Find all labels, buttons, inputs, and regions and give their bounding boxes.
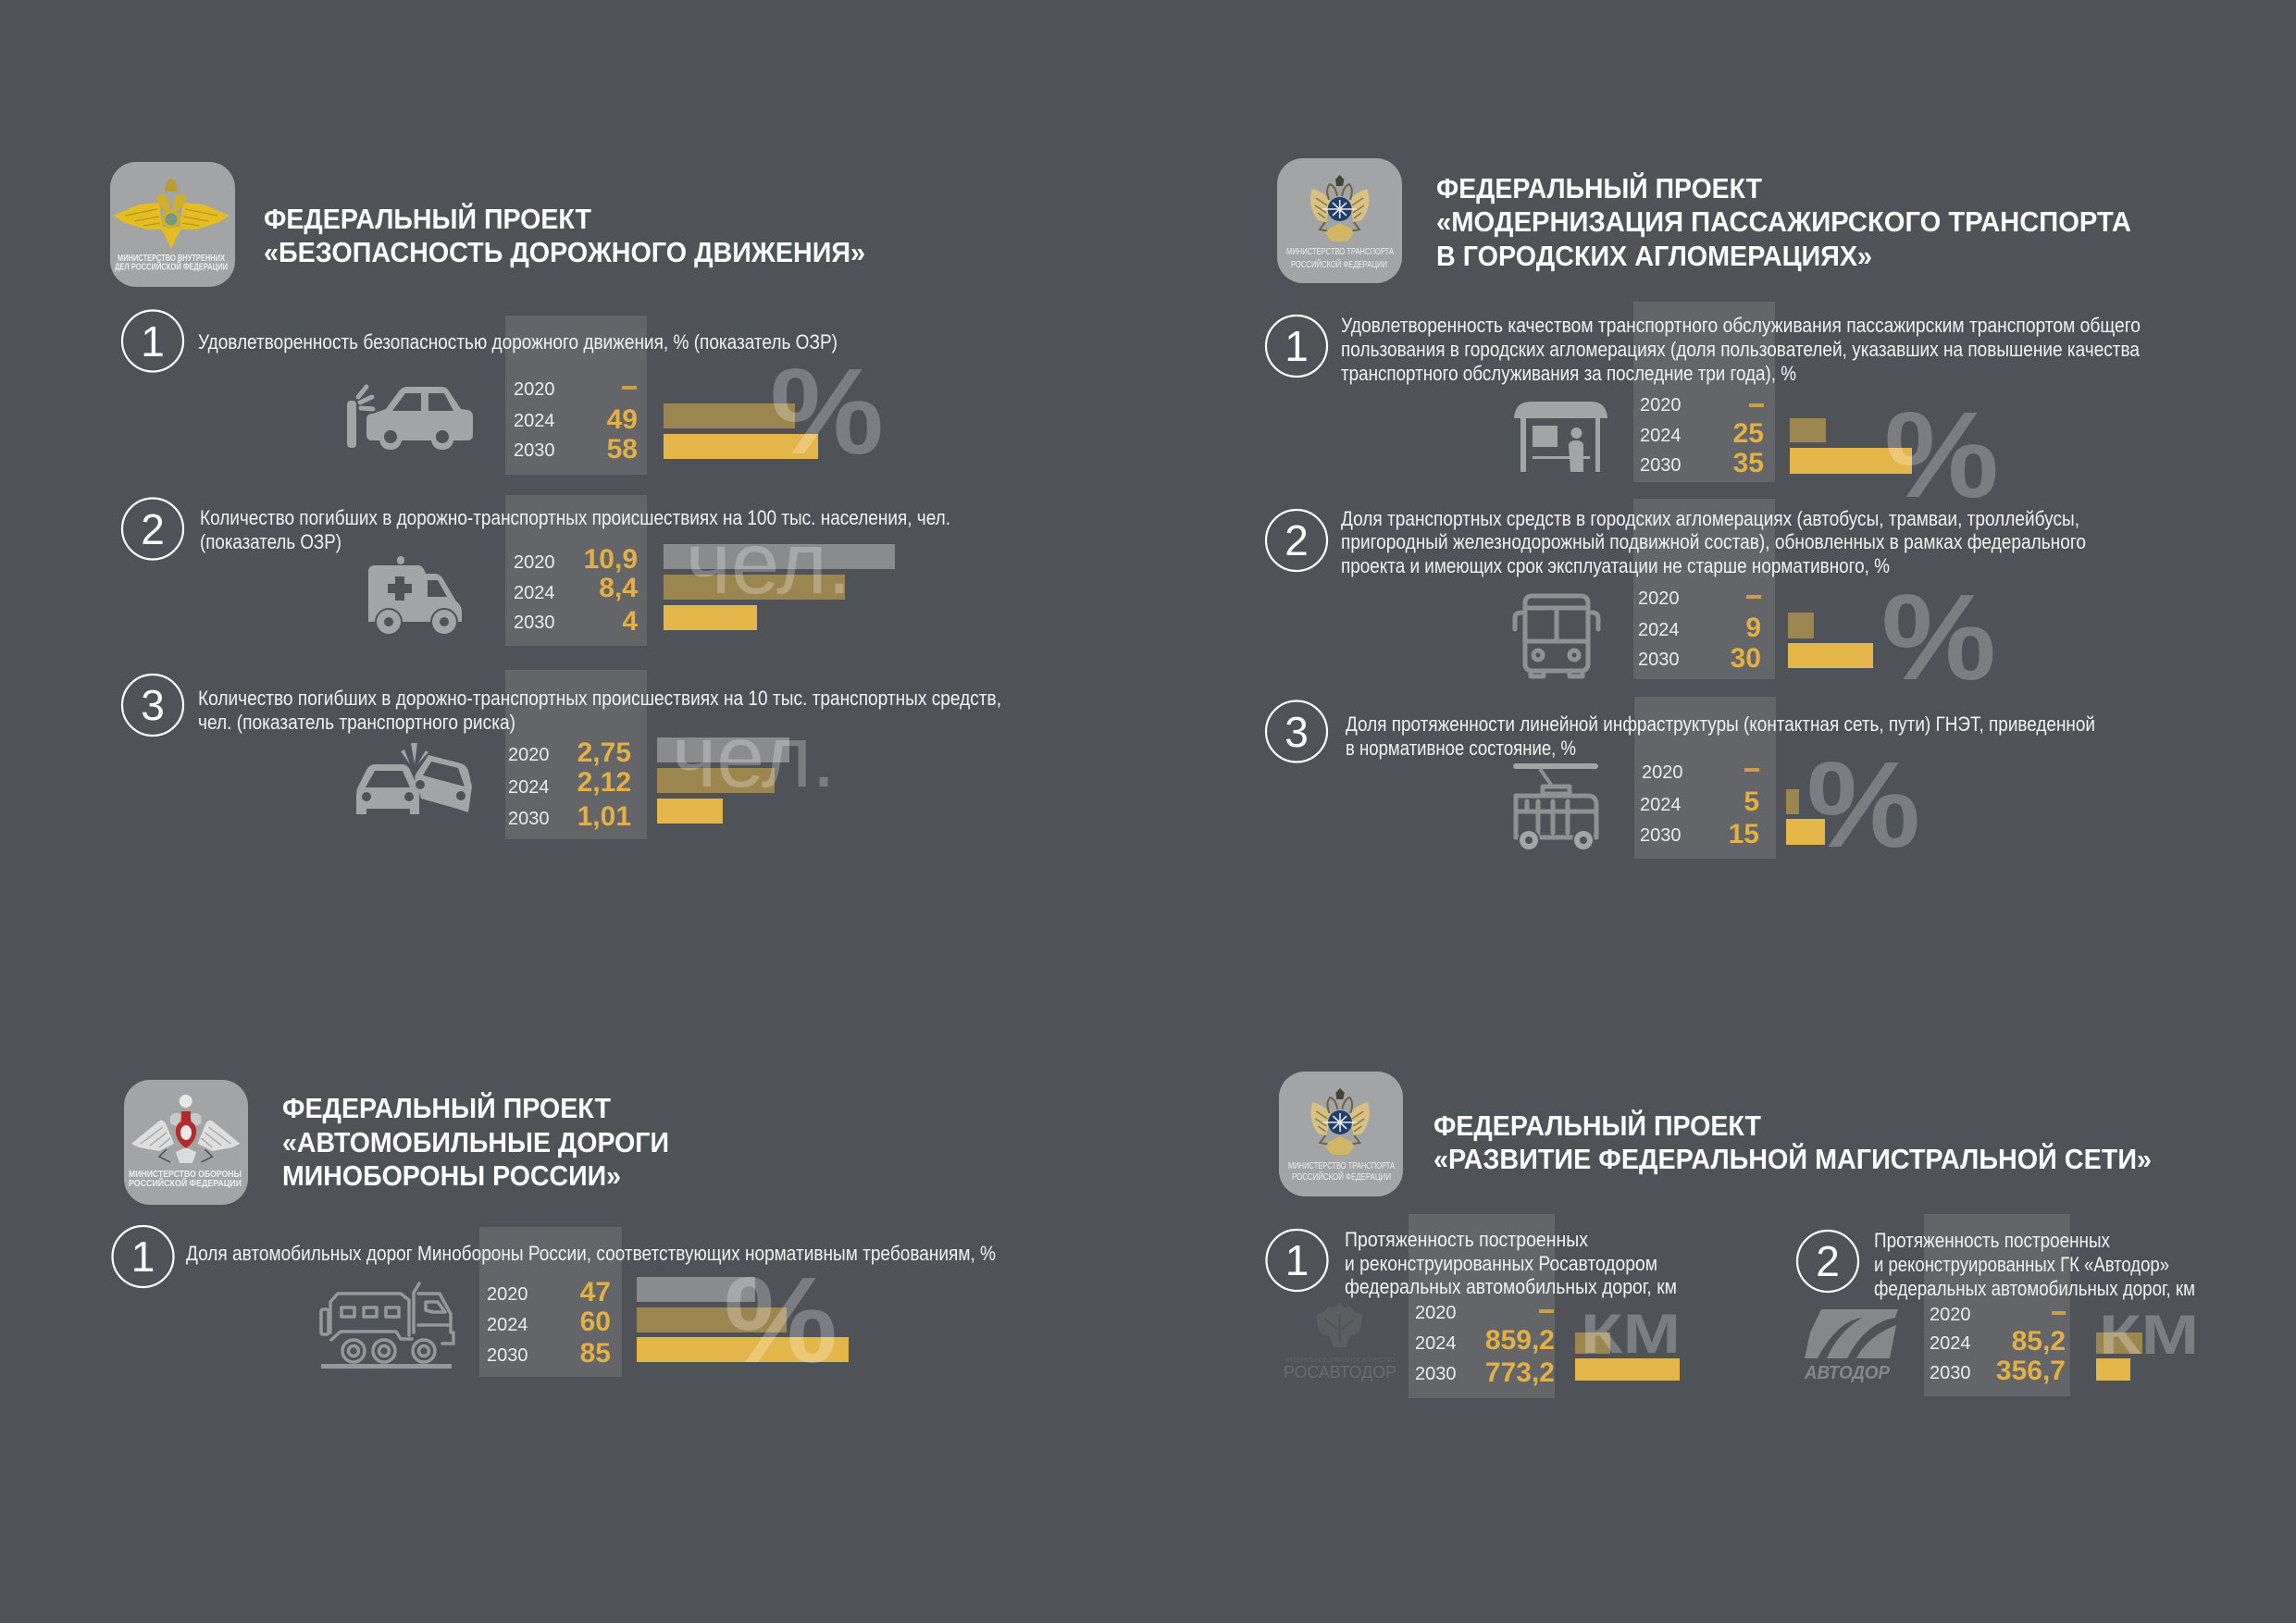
- indicator 2: 2: [1285, 516, 1309, 564]
- bar chart: [2096, 1304, 2199, 1381]
- icon: ambulance: [368, 556, 462, 636]
- panel: passenger transport: [1266, 158, 2141, 873]
- indicator 2: 2030: [1638, 650, 1679, 670]
- indicator 1: Удовлетворенность безопасностью дорожного движения, % (показатель ОЗР): [198, 330, 838, 353]
- indicator 2: [1797, 1214, 2199, 1396]
- bar chart: чел.: [686, 514, 851, 613]
- indicator 2: 2: [1816, 1237, 1840, 1285]
- heading: ФЕДЕРАЛЬНЫЙ ПРОЕКТ: [264, 202, 591, 235]
- bar chart: %: [770, 343, 884, 479]
- indicator 2: 2024: [1638, 620, 1679, 640]
- heading: [282, 1091, 669, 1192]
- logo: ministry of internal affairs: [110, 162, 235, 287]
- indicator 3: 5: [1744, 787, 1759, 817]
- logo: ministry of transport: РОССИЙСКОЙ ФЕДЕРАЦИИ: [1291, 258, 1387, 270]
- indicator 1: 2024: [514, 411, 555, 431]
- heading: [264, 202, 865, 268]
- bar chart: [664, 343, 884, 479]
- indicator 2: (показатель ОЗР): [200, 530, 341, 553]
- bar chart: КМ: [2099, 1304, 2199, 1366]
- indicator 2: Доля транспортных средств в городских агломерациях (автобусы, трамваи, троллейбусы,: [1341, 507, 2079, 530]
- indicator 3: Доля протяженности линейной инфраструктуры (контактная сеть, пути) ГНЭТ, приведенной: [1346, 712, 2095, 736]
- indicator 1: и реконструированных Росавтодором: [1345, 1252, 1657, 1275]
- indicator 1: [1266, 1214, 1681, 1398]
- indicator 1: 773,2: [1485, 1357, 1555, 1388]
- indicator 1: 2020: [1640, 395, 1681, 415]
- indicator 1: 2020: [487, 1284, 527, 1305]
- indicator 3: 2,12: [577, 767, 631, 798]
- logo: ministry of internal affairs: МИНИСТЕРСТВО ВНУТРЕННИХ: [118, 253, 225, 264]
- logo: ministry of transport: [1277, 158, 1402, 283]
- indicator 3: 2030: [508, 809, 550, 829]
- indicator 3: 3: [141, 681, 165, 729]
- logo: ministry of internal affairs: ДЕЛ РОССИЙСКОЙ ФЕДЕРАЦИИ: [115, 261, 228, 272]
- indicator 2: 2024: [1930, 1333, 1971, 1354]
- bar chart: %: [1806, 737, 1920, 873]
- indicator 1: 2030: [1640, 455, 1681, 476]
- logo: ministry of transport: МИНИСТЕРСТВО ТРАНСПОРТА: [1288, 1160, 1395, 1171]
- heading: ФЕДЕРАЛЬНЫЙ ПРОЕКТ: [1436, 171, 1762, 204]
- indicator 2: 2030: [514, 613, 555, 633]
- indicator 1: Доля автомобильных дорог Минобороны России, соответствующих нормативным требованиям, %: [186, 1242, 996, 1265]
- indicator 3: 3: [1285, 708, 1309, 756]
- indicator 2: 2024: [514, 583, 555, 603]
- bar chart: [1788, 569, 1996, 705]
- indicator 2: 85,2: [2012, 1326, 2066, 1357]
- indicator 1: 2020: [1415, 1303, 1457, 1323]
- indicator 3: 2024: [1640, 795, 1681, 815]
- indicator 2: 10,9: [584, 544, 638, 575]
- logo: ministry of defence: [124, 1080, 248, 1205]
- bar chart: КМ: [1581, 1303, 1681, 1365]
- indicator 2: Протяженность построенных: [1874, 1229, 2110, 1252]
- heading: «МОДЕРНИЗАЦИЯ ПАССАЖИРСКОГО ТРАНСПОРТА: [1436, 205, 2131, 238]
- heading: «АВТОМОБИЛЬНЫЕ ДОРОГИ: [282, 1126, 669, 1158]
- indicator 1: [113, 1226, 996, 1388]
- indicator 2: и реконструированных ГК «Автодор»: [1874, 1253, 2169, 1276]
- indicator 2: пригородный железнодорожный подвижной состав), обновленных в рамках федерального: [1341, 530, 2086, 553]
- logo: Avtodor: АВТОДОР: [1804, 1363, 1891, 1383]
- bar chart: [664, 514, 895, 630]
- indicator 3: 1,01: [577, 801, 631, 832]
- indicator 3: 2024: [508, 777, 550, 798]
- indicator 2: 9: [1745, 613, 1761, 643]
- indicator 2: 2020: [514, 552, 555, 573]
- indicator 2: [1266, 499, 2086, 705]
- bar chart: [1790, 387, 1999, 523]
- logo: Avtodor: [1804, 1309, 1898, 1383]
- indicator 1: 1: [1285, 1236, 1309, 1284]
- indicator 1: 1: [131, 1233, 155, 1281]
- indicator 1: 58: [607, 434, 638, 465]
- indicator 3: 2,75: [577, 737, 631, 768]
- indicator 2: 2020: [1930, 1305, 1971, 1325]
- bar chart: [637, 1252, 849, 1388]
- heading: В ГОРОДСКИХ АГЛОМЕРАЦИЯХ»: [1436, 240, 1872, 272]
- icon: bus: [1515, 596, 1598, 676]
- indicator 1: 2030: [514, 440, 555, 461]
- logo: Rosavtodor: РОСАВТОДОР: [1284, 1363, 1396, 1381]
- heading: [1433, 1109, 2152, 1175]
- indicator 1: 2024: [1415, 1333, 1457, 1354]
- indicator 2: 8,4: [599, 573, 638, 603]
- bar chart: [1575, 1303, 1681, 1381]
- heading: ФЕДЕРАЛЬНЫЙ ПРОЕКТ: [282, 1091, 611, 1124]
- indicator 1: федеральных автомобильных дорог, км: [1345, 1275, 1677, 1298]
- heading: «РАЗВИТИЕ ФЕДЕРАЛЬНОЙ МАГИСТРАЛЬНОЙ СЕТИ»: [1433, 1142, 2152, 1175]
- indicator 1: 35: [1733, 448, 1764, 478]
- icon: trolleybus: [1513, 763, 1598, 851]
- indicator 2: 2030: [1930, 1363, 1971, 1383]
- indicator 1: 1: [141, 317, 165, 365]
- indicator 3: 2020: [508, 745, 550, 765]
- logo: ministry of transport: [1279, 1072, 1403, 1196]
- indicator 2: 2020: [1638, 588, 1679, 609]
- indicator 1: 49: [607, 404, 638, 435]
- heading: «БЕЗОПАСНОСТЬ ДОРОЖНОГО ДВИЖЕНИЯ»: [264, 236, 865, 268]
- indicator 1: [122, 311, 884, 479]
- bar chart: чел.: [672, 708, 836, 806]
- indicator 3: [122, 670, 1001, 839]
- indicator 2: 356,7: [1996, 1356, 2066, 1386]
- indicator 3: [1266, 697, 2095, 873]
- icon: bus stop: [1514, 402, 1607, 472]
- indicator 2: 4: [622, 606, 638, 637]
- indicator 1: 47: [580, 1277, 611, 1307]
- heading: МИНОБОРОНЫ РОССИИ»: [282, 1159, 621, 1192]
- indicator 3: 2020: [1642, 762, 1682, 783]
- indicator 3: Количество погибших в дорожно-транспортных происшествиях на 10 тыс. транспортных средств,: [198, 687, 1001, 710]
- indicator 2: федеральных автомобильных дорог, км: [1874, 1277, 2195, 1300]
- heading: [1436, 171, 2131, 272]
- indicator 1: 2024: [487, 1315, 527, 1335]
- logo: ministry of defence: МИНИСТЕРСТВО ОБОРОНЫ: [129, 1169, 242, 1180]
- indicator 3: 2030: [1640, 825, 1681, 846]
- panel: military roads: [113, 1080, 996, 1388]
- indicator 2: 2: [141, 505, 165, 553]
- logo: ministry of defence: РОССИЙСКОЙ ФЕДЕРАЦИИ: [129, 1177, 242, 1189]
- icon: military truck: [321, 1283, 453, 1366]
- indicator 1: 2030: [1415, 1364, 1457, 1384]
- indicator 1: 2024: [1640, 426, 1681, 446]
- logo: ministry of transport: МИНИСТЕРСТВО ТРАНСПОРТА: [1286, 246, 1394, 257]
- logo: Rosavtodor: [1284, 1302, 1396, 1381]
- indicator 2: проекта и имеющих срок эксплуатации не старше нормативного, %: [1341, 554, 1890, 577]
- indicator 1: 25: [1733, 418, 1764, 449]
- indicator 3: чел. (показатель транспортного риска): [198, 711, 515, 734]
- indicator 1: пользования в городских агломерациях (доля пользователей, указавших на повышение качества: [1341, 338, 2141, 361]
- indicator 1: 60: [580, 1307, 611, 1337]
- indicator 1: 2020: [514, 379, 555, 400]
- panel: road safety: [110, 162, 1001, 839]
- icon: collision: [356, 743, 472, 814]
- bar chart: %: [1884, 387, 1999, 523]
- indicator 1: 85: [580, 1338, 611, 1369]
- indicator 3: 15: [1729, 819, 1759, 849]
- indicator 2: [122, 495, 950, 646]
- indicator 3: в нормативное состояние, %: [1346, 737, 1576, 760]
- bar chart: %: [1881, 569, 1996, 705]
- bar chart: %: [724, 1252, 838, 1388]
- logo: ministry of transport: РОССИЙСКОЙ ФЕДЕРАЦИИ: [1292, 1171, 1391, 1183]
- logo: Rosavtodor: ФЕДЕРАЛЬНОЕ ДОРОЖНОЕ АГЕНТСТВО: [1285, 1357, 1395, 1364]
- indicator 1: Удовлетворенность качеством транспортного обслуживания пассажирским транспортом общего: [1341, 314, 2141, 337]
- heading: ФЕДЕРАЛЬНЫЙ ПРОЕКТ: [1433, 1109, 1761, 1142]
- icon: car hitting post: [347, 387, 473, 450]
- indicator 2: 30: [1731, 643, 1761, 674]
- indicator 2: Количество погибших в дорожно-транспортных происшествиях на 100 тыс. населения, чел.: [200, 506, 950, 529]
- indicator 1: 1: [1285, 322, 1309, 370]
- indicator 1: 2030: [487, 1345, 527, 1366]
- indicator 1: [1266, 302, 2141, 523]
- panel: federal highway network: [1266, 1072, 2199, 1398]
- indicator 1: Протяженность построенных: [1345, 1228, 1588, 1251]
- indicator 1: транспортного обслуживания за последние три года), %: [1341, 362, 1796, 385]
- indicator 1: 859,2: [1485, 1325, 1555, 1356]
